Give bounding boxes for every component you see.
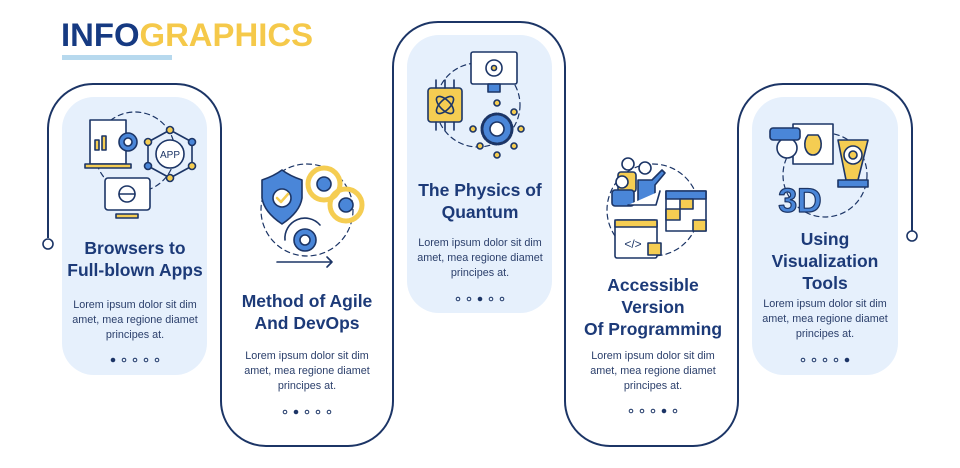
text: quantum body: amet, mea regione diamet — [417, 252, 543, 264]
text: visualization body: Lorem ipsum dolor sit dim — [763, 298, 887, 310]
text: visualization body: principes at. — [796, 328, 854, 340]
text: programming body: principes at. — [624, 380, 682, 392]
text: quantum title: Quantum — [442, 202, 518, 222]
icon: browsers apps — [85, 112, 196, 218]
text: programming title: Version — [621, 297, 685, 317]
text: visualization title: Visualization — [772, 251, 878, 271]
icon: programming — [607, 158, 706, 258]
text: programming body: amet, mea regione diamet — [590, 365, 716, 377]
text: browsers body: amet, mea regione diamet — [72, 314, 198, 326]
text: browsers body: principes at. — [106, 329, 164, 341]
panel: browsers — [62, 97, 207, 375]
text: browsers title: Browsers to — [84, 238, 186, 258]
panel: programming — [584, 158, 722, 413]
text: agile title: Method of Agile — [242, 291, 373, 311]
text: agile body: Lorem ipsum dolor sit dim — [245, 350, 369, 362]
dots — [283, 410, 331, 414]
text: visualization title: Using — [801, 229, 849, 249]
panel: quantum — [407, 35, 552, 313]
icon: quantum — [428, 52, 524, 158]
title: INFOGRAPHICS — [61, 17, 313, 53]
icon: programming: </> — [624, 237, 642, 251]
dots — [111, 358, 159, 362]
panel: visualization — [752, 97, 898, 375]
dots — [456, 297, 504, 301]
text: quantum body: Lorem ipsum dolor sit dim — [418, 237, 542, 249]
icon: visualization: 3D — [778, 182, 822, 220]
text: quantum title: The Physics of — [418, 180, 542, 200]
text: programming title: Of Programming — [584, 319, 722, 339]
text: agile title: And DevOps — [254, 313, 360, 333]
text: browsers title: Full-blown Apps — [67, 260, 203, 280]
icon: visualization — [770, 124, 868, 220]
dots — [629, 409, 677, 413]
text: programming title: Accessible — [607, 275, 699, 295]
text: agile body: amet, mea regione diamet — [244, 365, 370, 377]
text: browsers body: Lorem ipsum dolor sit dim — [73, 299, 197, 311]
dots — [801, 358, 849, 362]
icon: agile — [261, 164, 362, 267]
panel: agile devops — [242, 164, 373, 414]
text: visualization body: amet, mea regione diamet — [762, 313, 888, 325]
text: quantum body: principes at. — [451, 267, 509, 279]
text: agile body: principes at. — [278, 380, 336, 392]
text: visualization title: Tools — [802, 273, 848, 293]
text: programming body: Lorem ipsum dolor sit dim — [591, 350, 715, 362]
icon: browsers apps: APP — [160, 150, 180, 161]
